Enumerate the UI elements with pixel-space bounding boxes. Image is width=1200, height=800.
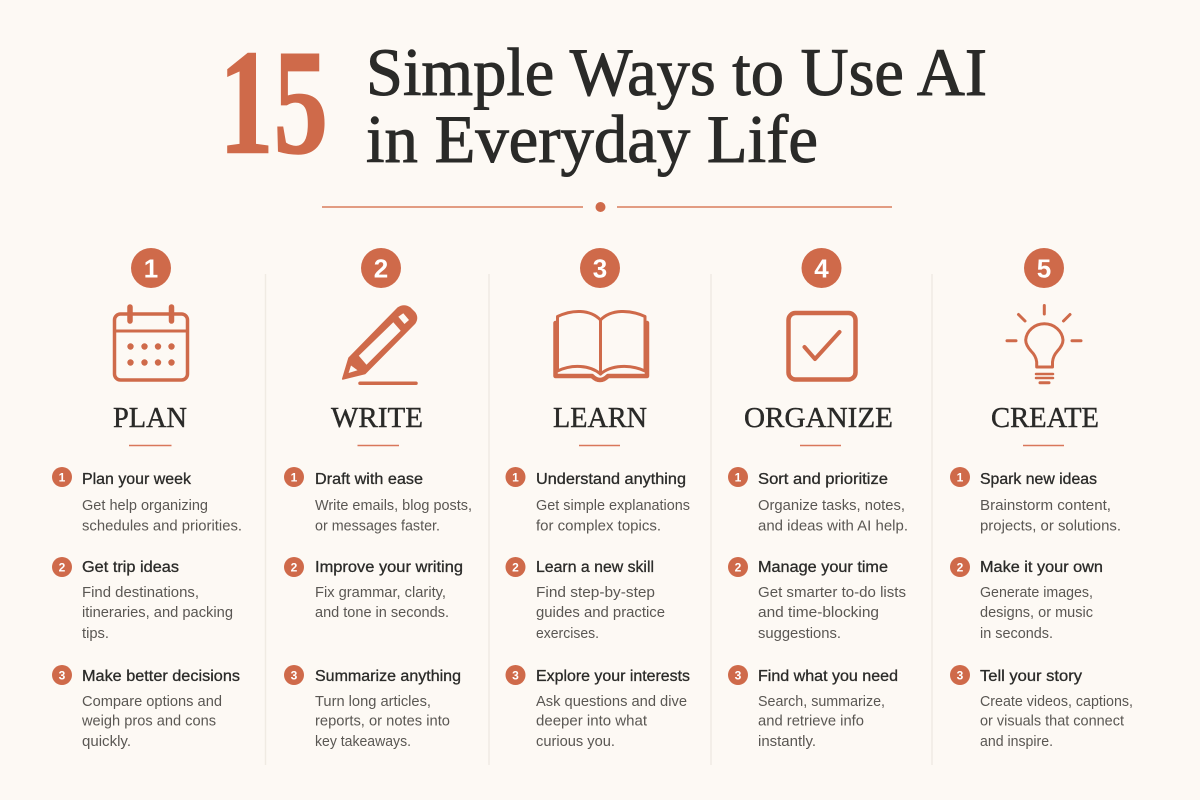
item: tell your story: Tell your story bbox=[980, 668, 1082, 685]
item: spark new ideas bbox=[950, 467, 1121, 534]
item: make it your own: Make it your own bbox=[980, 559, 1103, 576]
item: make better decisions: 3 bbox=[59, 668, 66, 682]
heading: organize: ORGANIZE bbox=[744, 403, 893, 434]
item: tell your story bbox=[950, 665, 1133, 750]
item: summarize anything bbox=[284, 665, 461, 750]
heading: create: CREATE bbox=[991, 403, 1099, 434]
panel: organize bbox=[728, 248, 908, 750]
number badge 4: 4 bbox=[814, 254, 829, 284]
number badge 5 bbox=[1024, 248, 1064, 288]
item: learn a new skill bbox=[506, 557, 665, 642]
item: learn a new skill: Learn a new skill bbox=[536, 559, 654, 576]
item: plan your week: Plan your week bbox=[82, 471, 191, 488]
icon: checkbox bbox=[788, 313, 856, 380]
item: explore your interests: 3 bbox=[512, 668, 519, 682]
item: draft with ease bbox=[284, 467, 472, 534]
item: spark new ideas: projects, or solutions. bbox=[980, 518, 1121, 534]
item: tell your story: or visuals that connect bbox=[980, 714, 1124, 730]
number badge 1: 1 bbox=[144, 254, 158, 284]
panel: write bbox=[284, 248, 472, 750]
item: get trip ideas: Find destinations, bbox=[82, 585, 199, 601]
item: sort and prioritize: and ideas with AI help. bbox=[758, 518, 908, 534]
item: draft with ease: Write emails, blog posts, bbox=[315, 498, 472, 514]
item: improve your writing: Improve your writing bbox=[315, 559, 463, 576]
item: understand anything bbox=[506, 467, 690, 534]
number badge 2 bbox=[361, 248, 401, 288]
item: make better decisions bbox=[52, 665, 240, 750]
item: explore your interests: Explore your interests bbox=[536, 668, 690, 685]
item: plan your week: Get help organizing bbox=[82, 498, 208, 514]
number badge 1 bbox=[131, 248, 171, 288]
item: tell your story: and inspire. bbox=[980, 734, 1053, 750]
item: get trip ideas: Get trip ideas bbox=[82, 559, 179, 576]
icon: light bulb bbox=[1007, 306, 1081, 383]
item: summarize anything: 3 bbox=[291, 668, 298, 682]
item: manage your time bbox=[728, 557, 906, 642]
item: manage your time: 2 bbox=[735, 560, 742, 574]
item: make better decisions: weigh pros and cons bbox=[81, 714, 216, 730]
item: understand anything: Understand anything bbox=[536, 471, 686, 488]
item: sort and prioritize bbox=[728, 467, 908, 534]
item: draft with ease: 1 bbox=[291, 470, 298, 484]
item: manage your time: Manage your time bbox=[758, 559, 888, 576]
panel: learn bbox=[506, 248, 690, 750]
title divider bbox=[322, 202, 892, 212]
number badge 5: 5 bbox=[1037, 254, 1051, 284]
heading: write: WRITE bbox=[331, 403, 423, 434]
item: improve your writing: Fix grammar, clarity, bbox=[315, 585, 446, 601]
item: plan your week bbox=[52, 467, 242, 534]
number badge 4 bbox=[802, 248, 842, 288]
item: improve your writing: 2 bbox=[291, 560, 298, 574]
title bbox=[219, 20, 987, 186]
item: find what you need: instantly. bbox=[758, 734, 816, 750]
icon: open book bbox=[556, 311, 647, 380]
item: sort and prioritize: 1 bbox=[735, 470, 742, 484]
item: find what you need: Search, summarize, bbox=[758, 694, 885, 710]
item: manage your time: and time-blocking bbox=[758, 605, 879, 621]
item: summarize anything: key takeaways. bbox=[315, 734, 411, 750]
item: tell your story: 3 bbox=[957, 668, 964, 682]
item: make it your own bbox=[950, 557, 1103, 642]
item: get trip ideas: itineraries, and packing bbox=[82, 605, 233, 621]
item: summarize anything: Summarize anything bbox=[315, 668, 461, 685]
panel: create bbox=[950, 248, 1133, 750]
item: make it your own: designs, or music bbox=[980, 605, 1093, 621]
item: plan your week: 1 bbox=[59, 470, 66, 484]
item: spark new ideas: Spark new ideas bbox=[980, 471, 1097, 488]
item: manage your time: Get smarter to-do lists bbox=[758, 585, 906, 601]
item: make better decisions: Compare options and bbox=[82, 694, 222, 710]
item: explore your interests bbox=[506, 665, 690, 750]
item: find what you need: and retrieve info bbox=[758, 714, 864, 730]
number badge 3: 3 bbox=[593, 254, 607, 284]
item: get trip ideas: tips. bbox=[82, 626, 109, 642]
heading: plan: PLAN bbox=[113, 403, 187, 434]
item: plan your week: schedules and priorities. bbox=[82, 518, 242, 534]
item: get trip ideas: 2 bbox=[59, 560, 66, 574]
item: understand anything: Get simple explanations bbox=[536, 498, 690, 514]
item: draft with ease: Draft with ease bbox=[315, 471, 423, 488]
panel: plan bbox=[52, 248, 242, 750]
item: make better decisions: Make better decisions bbox=[82, 668, 240, 685]
item: understand anything: 1 bbox=[512, 470, 519, 484]
item: sort and prioritize: Sort and prioritize bbox=[758, 471, 888, 488]
item: tell your story: Create videos, captions, bbox=[980, 694, 1133, 710]
big number 15: 15 bbox=[219, 20, 328, 186]
item: get trip ideas bbox=[52, 557, 233, 642]
item: summarize anything: reports, or notes into bbox=[315, 714, 450, 730]
item: learn a new skill: guides and practice bbox=[536, 605, 665, 621]
item: draft with ease: or messages faster. bbox=[315, 518, 440, 534]
title line 1: Simple Ways to Use AI bbox=[366, 34, 987, 110]
item: explore your interests: curious you. bbox=[536, 734, 615, 750]
item: spark new ideas: 1 bbox=[957, 470, 964, 484]
item: learn a new skill: Find step-by-step bbox=[536, 585, 655, 601]
item: make it your own: 2 bbox=[957, 560, 964, 574]
item: find what you need: Find what you need bbox=[758, 668, 898, 685]
number badge 2: 2 bbox=[374, 254, 388, 284]
item: explore your interests: Ask questions and dive bbox=[536, 694, 687, 710]
item: find what you need: 3 bbox=[735, 668, 742, 682]
item: summarize anything: Turn long articles, bbox=[315, 694, 431, 710]
item: sort and prioritize: Organize tasks, notes, bbox=[758, 498, 905, 514]
icon: pencil bbox=[343, 306, 416, 383]
item: find what you need bbox=[728, 665, 898, 750]
item: improve your writing: and tone in seconds. bbox=[315, 605, 449, 621]
item: make it your own: in seconds. bbox=[980, 626, 1053, 642]
heading: learn: LEARN bbox=[553, 403, 647, 434]
item: learn a new skill: 2 bbox=[512, 560, 519, 574]
item: learn a new skill: exercises. bbox=[536, 626, 599, 642]
item: improve your writing bbox=[284, 557, 463, 621]
item: understand anything: for complex topics. bbox=[536, 518, 661, 534]
title line 2: in Everyday Life bbox=[366, 101, 818, 177]
item: explore your interests: deeper into what bbox=[536, 714, 647, 730]
item: make better decisions: quickly. bbox=[82, 734, 131, 750]
item: make it your own: Generate images, bbox=[980, 585, 1093, 601]
item: manage your time: suggestions. bbox=[758, 626, 841, 642]
item: spark new ideas: Brainstorm content, bbox=[980, 498, 1111, 514]
number badge 3 bbox=[580, 248, 620, 288]
icon: calendar bbox=[114, 307, 188, 380]
